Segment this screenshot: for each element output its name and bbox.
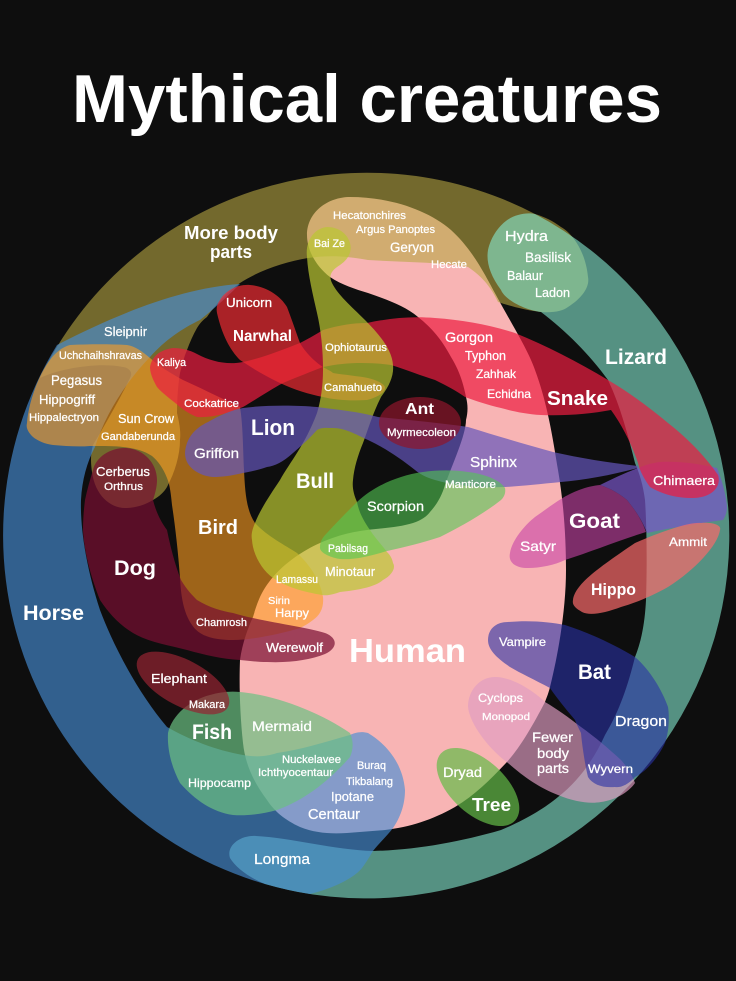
label: Sphinx: Sphinx — [470, 454, 518, 471]
region: Tree — [423, 733, 533, 841]
label: Hecate: Hecate — [431, 259, 467, 271]
label: Longma: Longma — [254, 851, 311, 868]
region: Fish — [168, 692, 353, 815]
label: Ammit: Ammit — [669, 535, 708, 549]
label: Werewolf: Werewolf — [266, 640, 323, 655]
region: Dog — [83, 448, 335, 662]
label: Narwhal: Narwhal — [233, 328, 292, 345]
label: Snake: Snake — [547, 388, 608, 410]
label: Vampire: Vampire — [499, 635, 546, 649]
label: Goat: Goat — [569, 510, 620, 533]
label: Hecatonchires: Hecatonchires — [333, 210, 407, 222]
label: Dog: Dog — [114, 557, 156, 580]
label: Buraq: Buraq — [357, 760, 386, 772]
label: Hippocamp: Hippocamp — [188, 776, 251, 790]
region: Bat — [488, 621, 669, 787]
label: Bat: Bat — [578, 661, 611, 684]
label: Makara: Makara — [189, 699, 226, 711]
region: Bird — [27, 344, 323, 640]
label: Scorpion: Scorpion — [367, 498, 424, 514]
label: Basilisk: Basilisk — [525, 249, 572, 265]
label: Echidna: Echidna — [487, 387, 531, 401]
region: Lizard — [229, 213, 729, 898]
label: Sleipnir: Sleipnir — [104, 324, 148, 339]
label: Kaliya: Kaliya — [157, 357, 187, 369]
label: Monopod: Monopod — [482, 711, 530, 723]
label: More body parts: parts — [210, 242, 252, 262]
label: Fewer body parts: body — [537, 745, 569, 761]
label: Tree: Tree — [472, 795, 511, 815]
title: Mythical creatures — [72, 61, 662, 137]
region: Ant — [379, 397, 461, 449]
region: Goat — [510, 485, 646, 568]
region: Lion right lobe — [600, 462, 727, 533]
label: Gandaberunda: Gandaberunda — [101, 431, 176, 443]
label: Fewer body parts: Fewer — [532, 729, 573, 745]
label: Camahueto: Camahueto — [324, 382, 382, 394]
label: Harpy: Harpy — [275, 606, 309, 620]
region: Lion — [185, 406, 638, 487]
label: Wyvern: Wyvern — [588, 762, 633, 776]
label: Manticore: Manticore — [445, 479, 496, 491]
label: Tikbalang: Tikbalang — [346, 776, 393, 788]
label: Gorgon: Gorgon — [445, 329, 493, 345]
region: Hippo — [573, 523, 720, 614]
label: Uchchaihshravas: Uchchaihshravas — [59, 350, 142, 362]
label: Human: Human — [349, 632, 466, 669]
label: Cerberus: Cerberus — [96, 465, 150, 479]
label: Dragon: Dragon — [615, 713, 667, 730]
label: Lion: Lion — [251, 415, 295, 440]
label: Fewer body parts: parts — [537, 760, 569, 776]
label: Dryad: Dryad — [443, 764, 482, 780]
label: Chimaera: Chimaera — [653, 473, 716, 488]
label: Typhon: Typhon — [465, 348, 506, 363]
label: Pegasus: Pegasus — [51, 372, 102, 388]
label: Lamassu: Lamassu — [276, 574, 318, 586]
label: Elephant: Elephant — [151, 671, 207, 686]
label: Orthrus: Orthrus — [104, 481, 144, 493]
label: Ladon: Ladon — [535, 285, 570, 300]
label: Griffon: Griffon — [194, 445, 239, 461]
label: Unicorn: Unicorn — [226, 295, 272, 310]
label: Cyclops: Cyclops — [478, 691, 523, 705]
label: Cockatrice: Cockatrice — [184, 398, 239, 410]
region: More body parts — [40, 173, 588, 508]
label: Sun Crow: Sun Crow — [118, 411, 175, 426]
label: Balaur: Balaur — [507, 269, 543, 283]
label: Hydra: Hydra — [505, 228, 549, 245]
label: Chamrosh: Chamrosh — [196, 617, 247, 629]
label: Ichthyocentaur: Ichthyocentaur — [258, 767, 333, 779]
label: Horse: Horse — [23, 602, 84, 625]
label: Hippo: Hippo — [591, 580, 636, 599]
label: Centaur: Centaur — [308, 807, 360, 823]
label: Sirin: Sirin — [268, 596, 290, 607]
label: Myrmecoleon: Myrmecoleon — [387, 427, 456, 439]
label: More body parts: More body — [184, 223, 278, 243]
label: Lizard: Lizard — [605, 346, 667, 369]
label: Satyr: Satyr — [520, 538, 556, 554]
label: Hippogriff: Hippogriff — [39, 392, 95, 407]
labels — [23, 210, 716, 868]
region: Horse — [3, 284, 405, 894]
label: Hippalectryon: Hippalectryon — [29, 412, 99, 424]
label: Zahhak: Zahhak — [476, 367, 517, 381]
region: Human — [240, 197, 566, 833]
label: Minotaur: Minotaur — [325, 565, 375, 579]
label: More body parts — [184, 223, 278, 262]
region: Scorpion — [320, 470, 505, 559]
label: Fish: Fish — [192, 721, 232, 744]
label: Geryon: Geryon — [390, 239, 434, 255]
label: Argus Panoptes: Argus Panoptes — [356, 224, 435, 236]
label: Nuckelavee: Nuckelavee — [282, 754, 341, 766]
label: Fewer body parts — [532, 729, 573, 776]
label: Mermaid: Mermaid — [252, 718, 312, 734]
region: Bull — [252, 227, 394, 595]
region: Snake — [150, 317, 719, 498]
label: Bull: Bull — [296, 470, 334, 493]
label: Bird: Bird — [198, 517, 238, 539]
label: Ophiotaurus: Ophiotaurus — [325, 342, 388, 354]
label: Pabilsag: Pabilsag — [328, 543, 368, 555]
region: Fewer body parts — [468, 677, 635, 803]
region: Narwhal — [217, 285, 385, 400]
label: Ipotane: Ipotane — [331, 789, 374, 804]
label: Ant: Ant — [405, 401, 435, 418]
label: Bai Ze: Bai Ze — [314, 238, 345, 250]
region: Elephant — [127, 639, 239, 727]
